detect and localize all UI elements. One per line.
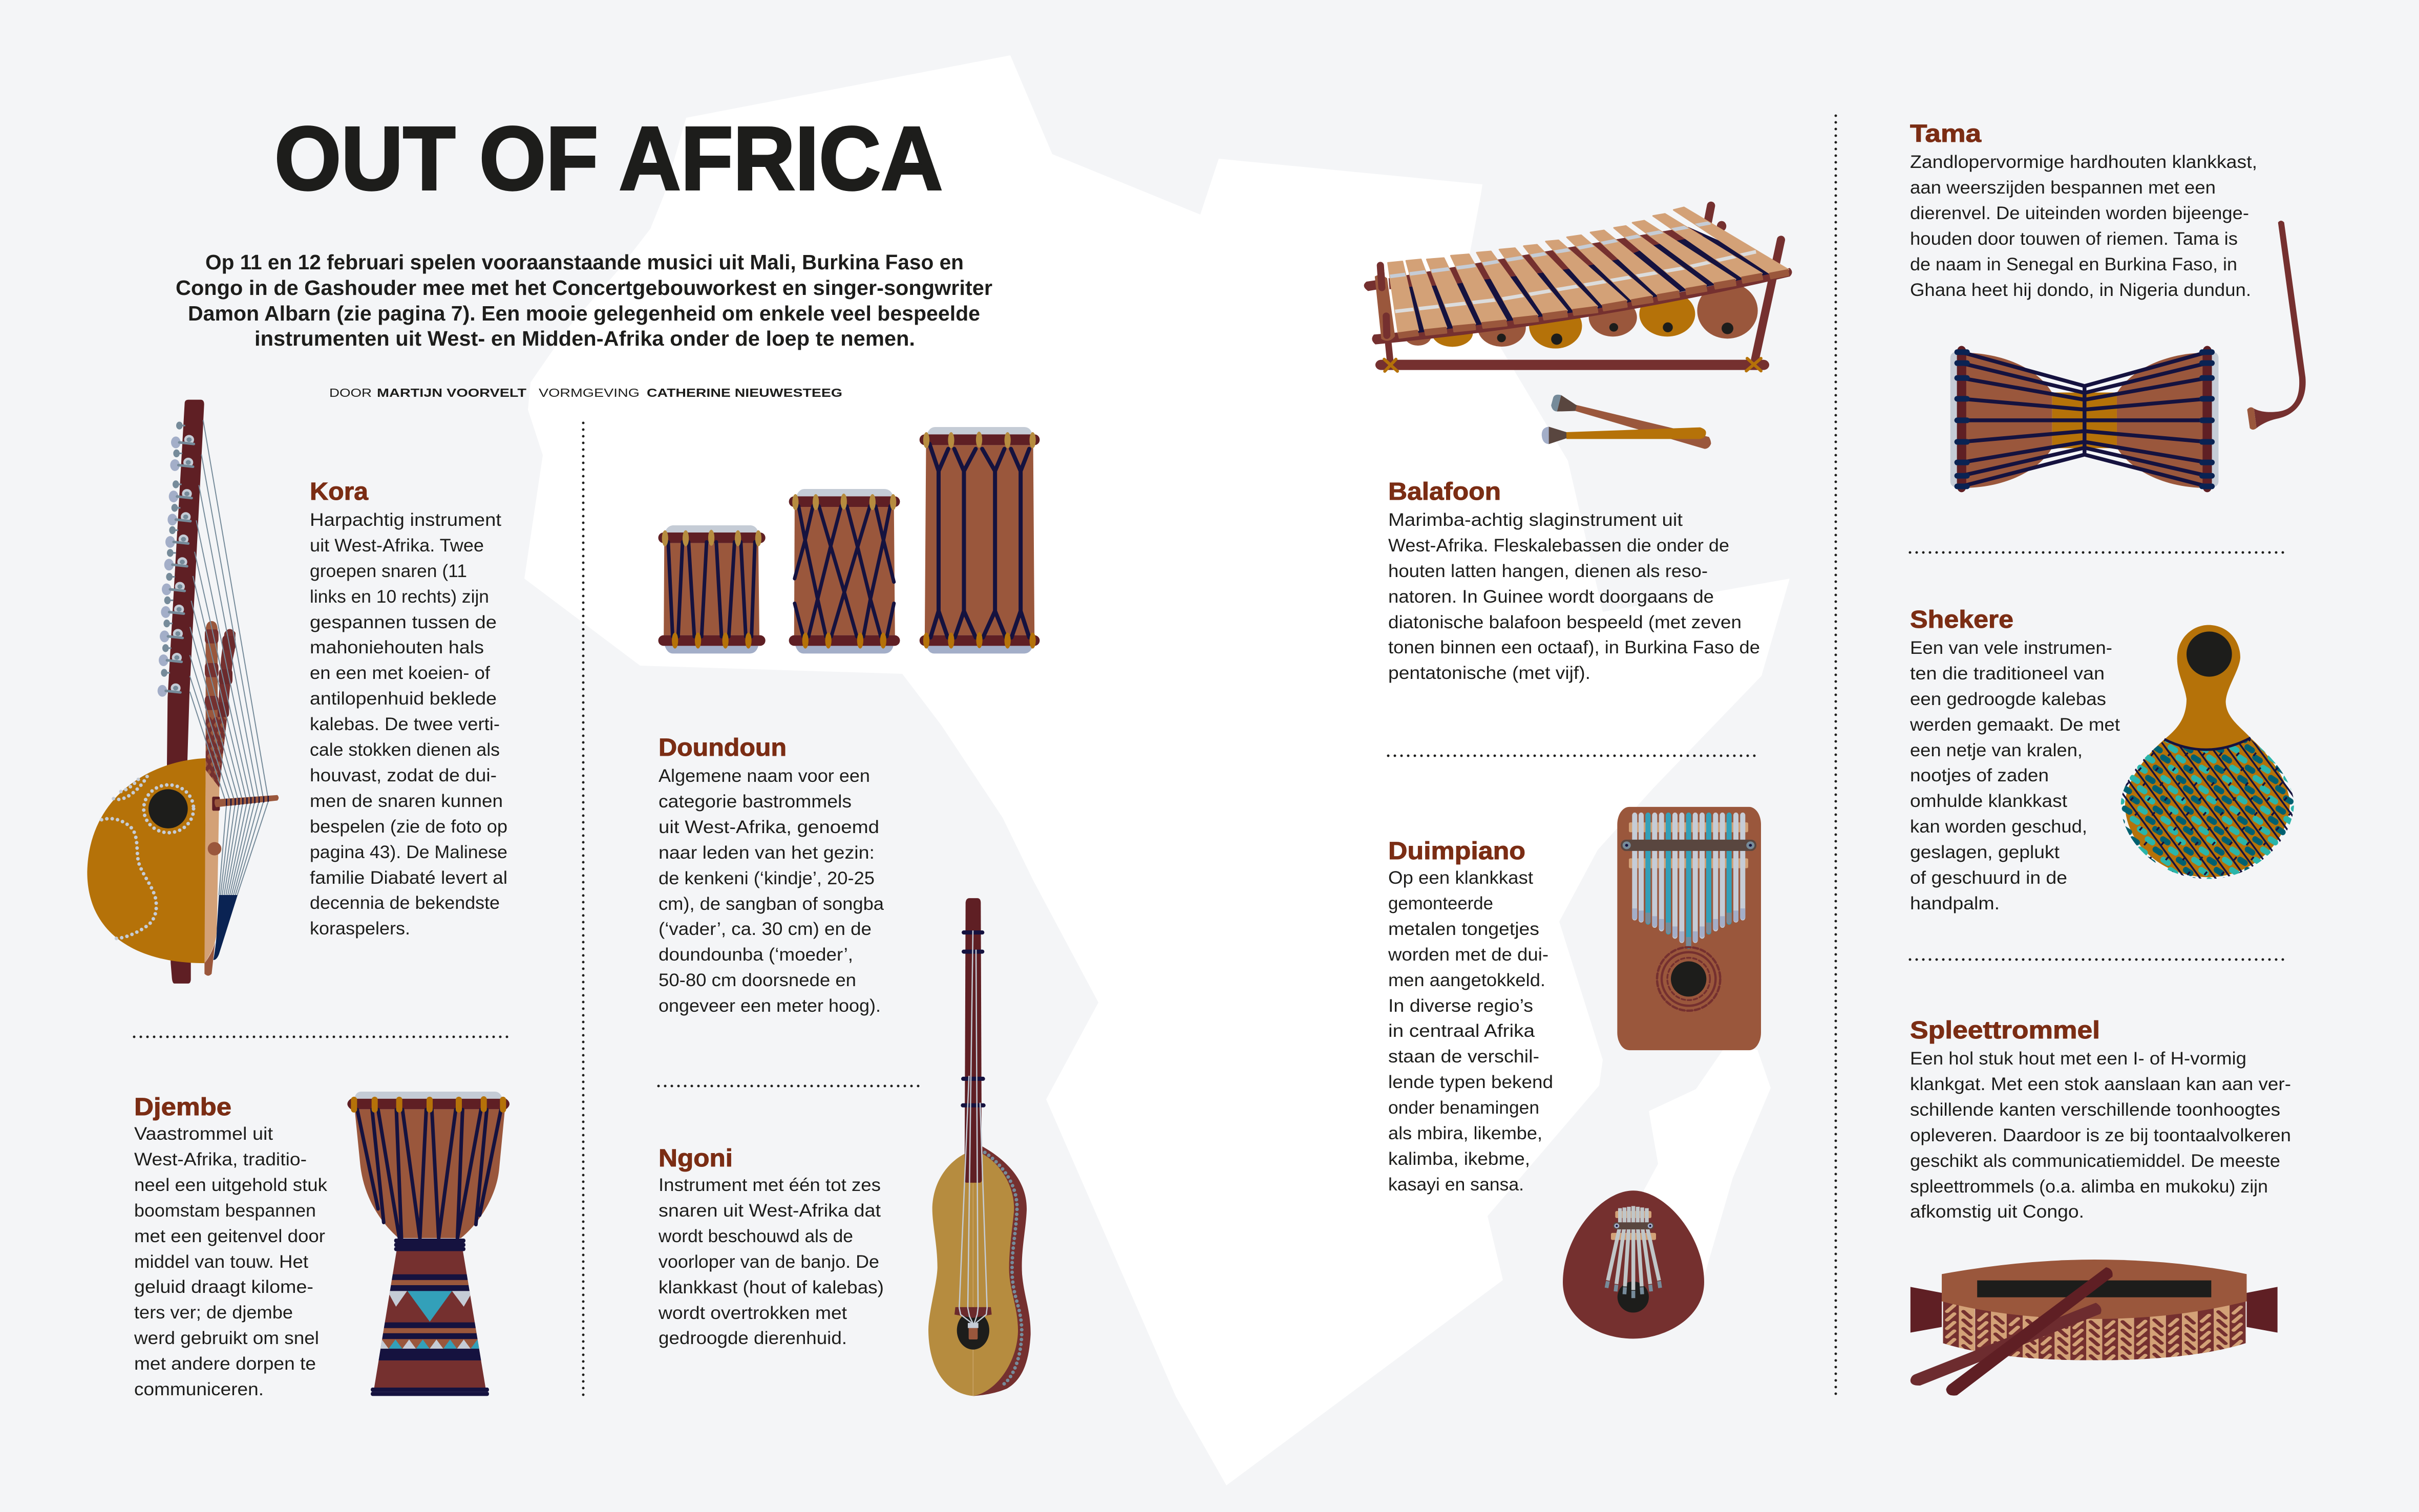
kora side panel [204, 770, 219, 963]
text: Ngoni: snaren uit West-Afrika dat [659, 1200, 881, 1221]
doundounba drum [920, 427, 1039, 653]
text: Doundoun: categorie bastrommels [659, 791, 852, 812]
text: Duimpiano: metalen tongetjes [1388, 919, 1539, 939]
text: Shekere: werden gemaakt. De met [1909, 714, 2120, 735]
board body [1617, 807, 1761, 1050]
shekere rim cord [2165, 738, 2251, 750]
djembe cords [357, 1110, 501, 1238]
text: Tama: houden door touwen of riemen. Tama is [1910, 228, 2238, 249]
byline: VORMGEVING [539, 386, 640, 399]
text: Djembe: met een geitenvel door [134, 1226, 325, 1246]
balafoon slat ends [1398, 270, 1789, 338]
kora navy base [214, 895, 238, 960]
text: Balafoon: tonen binnen een octaaf), in Burkina Faso de [1388, 637, 1760, 657]
text: Kora: bespelen (zie de foto op [310, 816, 507, 837]
djembe bowl [355, 1109, 505, 1238]
drumstick foot [2247, 407, 2257, 430]
text: Balafoon: Marimba-achtig slaginstrument uit [1388, 509, 1683, 530]
text: Shekere: ten die traditioneel van [1910, 663, 2105, 684]
ngoni strings [959, 930, 987, 1323]
shekere beads [2120, 738, 2296, 881]
text: Doundoun: (‘vader’, ca. 30 cm) en de [659, 919, 872, 939]
text: Kora: gespannen tussen de [310, 612, 497, 632]
mallet one [1551, 395, 1711, 449]
text: Shekere: geslagen, geplukt [1910, 842, 2060, 862]
gourd sound hole [1618, 1282, 1649, 1313]
text: Balafoon: houten latten hangen, dienen als reso- [1388, 561, 1708, 581]
text: Kora: familie Diabaté levert al [310, 867, 507, 888]
text: Ngoni: Ngoni [659, 1145, 733, 1172]
instrument: kora [87, 400, 279, 984]
text: Djembe [134, 1094, 327, 1399]
byline: CATHERINE NIEUWESTEEG [647, 386, 842, 399]
text: Balafoon: natoren. In Guinee wordt doorgaans de [1388, 586, 1714, 607]
text: Doundoun: doundounba (‘moeder’, [659, 944, 853, 965]
djembe rim [347, 1099, 510, 1109]
kora strings [190, 420, 268, 895]
byline: DOOR [329, 386, 372, 399]
text: Spleettrommel [1910, 1017, 2291, 1222]
text: Djembe: West-Afrika, traditio- [134, 1149, 307, 1169]
text: Duimpiano: Op een klankkast [1388, 867, 1533, 888]
text: Spleettrommel: geschikt als communicatiemiddel. De meeste [1910, 1151, 2280, 1171]
text: Doundoun: de kenkeni (‘kindje’, 20-25 [659, 868, 875, 888]
text: Kora: cale stokken dienen als [310, 739, 500, 760]
text: Tama: Zandlopervormige hardhouten klankkast, [1910, 152, 2257, 172]
balafoon binding [1384, 358, 1761, 371]
instrument: balafoon [1364, 206, 1792, 449]
text: Tama: de naam in Senegal en Burkina Faso, in [1910, 254, 2237, 274]
text: Spleettrommel: klankgat. Met een stok aanslaan kan aan ver- [1910, 1074, 2291, 1094]
intro text: Damon Albarn (zie pagina 7). Een mooie gelegenheid om enkele veel bespeelde [188, 302, 980, 325]
wood bars [1629, 822, 1748, 832]
title: OUT OF AFRICA [274, 109, 943, 209]
text: Spleettrommel: Een hol stuk hout met een I- of H-vormig [1910, 1048, 2246, 1069]
balafoon underlay [1389, 227, 1787, 335]
text: Ngoni: gedroogde dierenhuid. [659, 1328, 847, 1348]
instrument: gourd thumb piano [1563, 1190, 1704, 1338]
text: Doundoun: uit West-Afrika, genoemd [659, 817, 879, 837]
text: Djembe: Djembe [134, 1094, 231, 1121]
text: Tama: Tama [1910, 120, 1981, 147]
kora neck [167, 400, 204, 984]
text: Kora: links en 10 rechts) zijn [310, 586, 489, 607]
instrument: djembe [347, 1092, 510, 1396]
text: Shekere: of geschuurd in de [1910, 867, 2067, 888]
text: Djembe: communiceren. [134, 1379, 264, 1399]
text: Ngoni: klankkast (hout of kalebas) [659, 1277, 884, 1297]
gourd tines [1606, 1206, 1660, 1298]
text: Djembe: met andere dorpen te [134, 1353, 316, 1374]
tama body [1963, 353, 2206, 488]
text: Duimpiano [1388, 838, 1553, 1195]
ngoni bridge [954, 1307, 992, 1318]
text: Ngoni: wordt beschouwd als de [658, 1226, 853, 1246]
text: Tama: Ghana heet hij dondo, in Nigeria dundun. [1910, 280, 2251, 300]
balafoon slats [1388, 207, 1788, 333]
ngoni sound hole [957, 1311, 989, 1350]
text: Shekere: omhulde klankkast [1910, 791, 2067, 811]
text: Ngoni [658, 1145, 884, 1348]
text: Kora [310, 478, 507, 939]
sangban drum [789, 489, 900, 653]
instrument: doundoun drums [659, 427, 1039, 653]
text: Tama [1910, 120, 2257, 300]
djembe lower body [374, 1251, 485, 1388]
text: Kora: Kora [310, 478, 368, 505]
ngoni side edge [973, 1146, 1031, 1396]
tama cord ends [1957, 352, 2212, 486]
text: Djembe: boomstam bespannen [134, 1200, 316, 1221]
text: Kora: koraspelers. [310, 918, 410, 939]
shekere gourd [2125, 625, 2290, 877]
balafoon frame [1364, 268, 1792, 345]
kora tuning pegs [158, 421, 194, 697]
instrument: tama [1950, 346, 2218, 492]
text: Shekere: nootjes of zaden [1910, 765, 2049, 785]
text: Duimpiano: staan de verschil- [1388, 1046, 1539, 1067]
instrument: duimpiano board [1617, 807, 1761, 1050]
stick one [1911, 1303, 2102, 1386]
text: Duimpiano: gemonteerde [1388, 893, 1493, 913]
gourd body [1563, 1190, 1704, 1338]
dotted dividers [134, 116, 2283, 1396]
text: Djembe: neel een uitgehold stuk [134, 1175, 327, 1195]
text: Tama: dierenvel. De uiteinden worden bijeenge- [1910, 203, 2249, 223]
text: Kora: men de snaren kunnen [310, 791, 503, 811]
text: Kora: Harpachtig instrument [310, 509, 501, 530]
text: Djembe: ters ver; de djembe [134, 1302, 293, 1323]
mallet two [1542, 427, 1706, 444]
text: Duimpiano: Duimpiano [1388, 838, 1525, 865]
instrument: shekere [2121, 625, 2294, 879]
text: Spleettrommel: afkomstig uit Congo. [1910, 1201, 2084, 1222]
ngoni neck [965, 898, 982, 1183]
text: Duimpiano: als mbira, likembe, [1388, 1123, 1542, 1143]
text: Balafoon: diatonische balafoon bespeeld (met zeven [1388, 612, 1742, 632]
text: Spleettrommel: schillende kanten verschillende toonhoogtes [1910, 1099, 2280, 1120]
text: Balafoon: pentatonische (met vijf). [1388, 663, 1590, 683]
text: Doundoun: Doundoun [659, 734, 787, 761]
text: Djembe: Vaastrommel uit [134, 1123, 273, 1144]
text: Duimpiano: worden met de dui- [1388, 944, 1548, 965]
text: Kora: antilopenhuid beklede [310, 688, 497, 709]
text: Shekere: kan worden geschud, [1910, 816, 2087, 837]
text: Ngoni: Instrument met één tot zes [659, 1175, 881, 1195]
text: Duimpiano: kalimba, ikebme, [1388, 1148, 1530, 1169]
balafoon posts [1708, 206, 1781, 359]
tama skins [1950, 352, 1965, 487]
sound hole with rings [1657, 947, 1720, 1011]
map of Africa [524, 55, 1790, 1485]
text: Doundoun: 50-80 cm doorsnede en [659, 970, 856, 990]
text: Shekere: een netje van kralen, [1910, 740, 2083, 760]
pressure bar [1621, 840, 1756, 851]
text: Duimpiano: in centraal Afrika [1388, 1020, 1535, 1041]
gourd wood bars [1615, 1211, 1651, 1218]
ngoni body [928, 1154, 1018, 1396]
text: Djembe: middel van touw. Het [134, 1251, 308, 1272]
text: Duimpiano: men aangetokkeld. [1388, 970, 1545, 990]
text: Doundoun: Algemene naam voor een [659, 765, 870, 786]
text: Balafoon [1388, 478, 1760, 683]
text: Kora: houvast, zodat de dui- [310, 765, 497, 785]
tama rims [1957, 346, 1966, 492]
text: Ngoni: wordt overtrokken met [658, 1303, 847, 1323]
instrument: tama drumstick [2247, 221, 2306, 430]
text: Kora: kalebas. De twee verti- [310, 714, 500, 734]
text: Kora: en een met koeien- of [310, 663, 490, 683]
text: Kora: uit West-Afrika. Twee [310, 535, 484, 556]
kenkeni drum [659, 525, 766, 653]
ngoni side studs [985, 1153, 1022, 1384]
text: Duimpiano: In diverse regio’s [1388, 995, 1533, 1016]
intro text: Congo in de Gashouder mee met het Concertgebouworkest en singer-songwriter [176, 276, 992, 300]
intro text: instrumenten uit West- en Midden-Afrika onder de loep te nemen. [254, 327, 915, 350]
balafoon side bar [1375, 265, 1395, 341]
text: Djembe: werd gebruikt om snel [134, 1328, 319, 1348]
balafoon gourds [1405, 283, 1758, 349]
slit drum end pieces [1911, 1287, 2278, 1333]
intro text: Op 11 en 12 februari spelen vooraanstaande musici uit Mali, Burkina Faso en [205, 250, 964, 274]
intro text [176, 250, 992, 350]
text: Shekere: handpalm. [1910, 893, 2000, 913]
text: Shekere: een gedroogde kalebas [1910, 689, 2106, 709]
text: Spleettrommel: Spleettrommel [1910, 1017, 2100, 1044]
ngoni neck bands [963, 932, 984, 1105]
text: Tama: aan weerszijden bespannen met een [1910, 177, 2216, 198]
text: Spleettrommel: opleveren. Daardoor is ze bij toontaalvolkeren [1910, 1125, 2291, 1145]
text: Spleettrommel: spleettrommels (o.a. alimba en mukoku) zijn [1910, 1176, 2268, 1197]
text: Doundoun [659, 734, 884, 1016]
metal tines [1632, 813, 1745, 949]
text: Ngoni: voorloper van de banjo. De [659, 1251, 879, 1272]
text: Djembe: geluid draagt kilome- [134, 1276, 313, 1297]
djembe pattern [379, 1274, 481, 1360]
text: Kora: decennia de bekendste [310, 892, 500, 913]
text: Shekere [1909, 606, 2120, 913]
stick two [1946, 1267, 2113, 1396]
kora dot decoration [101, 774, 194, 939]
tama cords [1961, 352, 2207, 486]
shekere net [2122, 739, 2294, 879]
text: Doundoun: naar leden van het gezin: [659, 842, 875, 863]
text: Doundoun: cm), de sangban of songba [659, 893, 884, 914]
balafoon cords [1389, 223, 1756, 311]
text: Shekere: Een van vele instrumen- [1910, 637, 2112, 658]
text: Balafoon: West-Afrika. Fleskalebassen die onder de [1388, 535, 1729, 556]
text: Doundoun: ongeveer een meter hoog). [659, 995, 881, 1016]
text: Duimpiano: lende typen bekend [1388, 1072, 1553, 1092]
slit drum carved band [1943, 1302, 2246, 1360]
djembe skin [354, 1092, 503, 1099]
balafoon base bar [1375, 360, 1769, 370]
djembe pegs [351, 1096, 506, 1113]
kora gourd [87, 758, 206, 963]
byline [329, 386, 842, 399]
gourd pressure bar [1613, 1222, 1654, 1229]
text: Kora: pagina 43). De Malinese [310, 842, 507, 862]
text: Kora: groepen snaren (11 [310, 561, 467, 581]
instrument: spleettrommel [1911, 1260, 2278, 1396]
slit drum top [1942, 1260, 2246, 1319]
text: Duimpiano: kasayi en sansa. [1388, 1174, 1524, 1195]
djembe rings [371, 1239, 489, 1396]
instrument: ngoni [928, 898, 1031, 1396]
text: Kora: mahoniehouten hals [310, 637, 484, 657]
kora handles [205, 621, 236, 787]
text: Duimpiano: onder benamingen [1388, 1097, 1539, 1118]
kora sound hole [148, 789, 188, 828]
shekere hole [2187, 631, 2232, 677]
text: Shekere: Shekere [1910, 606, 2013, 633]
slit opening [1977, 1281, 2211, 1297]
byline: MARTIJN VOORVELT [377, 386, 526, 399]
kora bridge [212, 795, 279, 811]
text: Balafoon: Balafoon [1388, 478, 1501, 505]
